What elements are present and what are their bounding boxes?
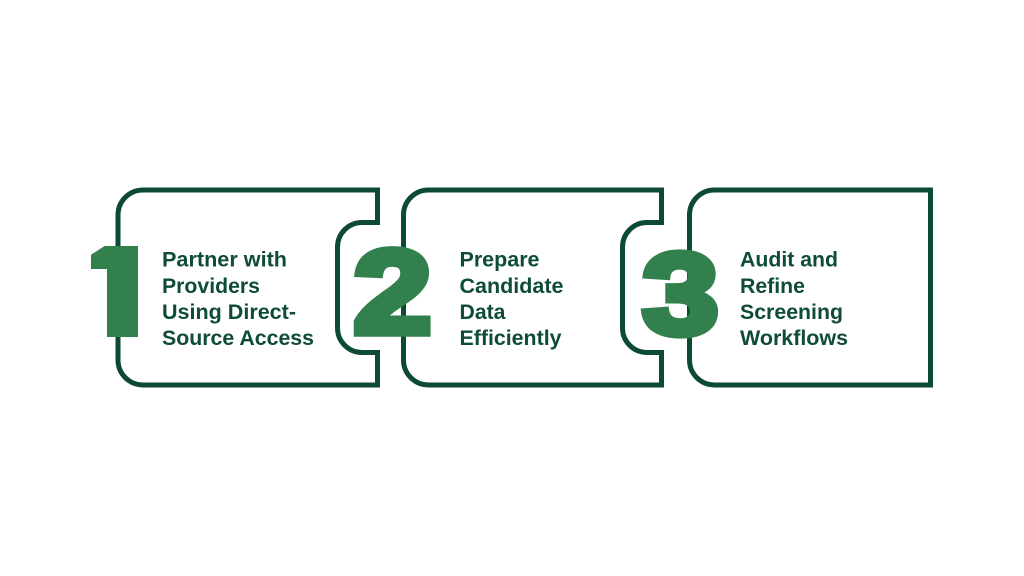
step 2 text: Candidate xyxy=(460,275,564,298)
step 1 text xyxy=(162,248,314,350)
step 1 outline xyxy=(118,190,378,385)
step 1 text: Using Direct- xyxy=(162,301,296,324)
step 2 number: 2 xyxy=(354,225,432,358)
step 3 text: Screening xyxy=(740,301,843,324)
step 2 text: Data xyxy=(460,301,506,324)
step 1 text: Providers xyxy=(162,275,260,298)
panel: step 1 xyxy=(85,190,378,385)
step 2 text: Efficiently xyxy=(460,327,562,350)
step 2 text xyxy=(460,248,564,350)
panel: step 3 xyxy=(642,190,930,385)
step 2 outline xyxy=(404,190,662,385)
step 1 text: Source Access xyxy=(162,327,314,350)
step 1 text: Partner with xyxy=(162,248,287,272)
step 3 number: 3 xyxy=(642,230,719,358)
step 2 text: Prepare xyxy=(460,248,540,272)
step 3 text: Workflows xyxy=(740,327,848,350)
step 3 text xyxy=(740,248,848,350)
step 3 outline xyxy=(690,190,930,385)
step 3 text: Refine xyxy=(740,275,805,298)
step 1 number: 1 xyxy=(85,222,156,365)
step 3 text: Audit and xyxy=(740,248,838,272)
panel: step 2 xyxy=(354,190,662,385)
